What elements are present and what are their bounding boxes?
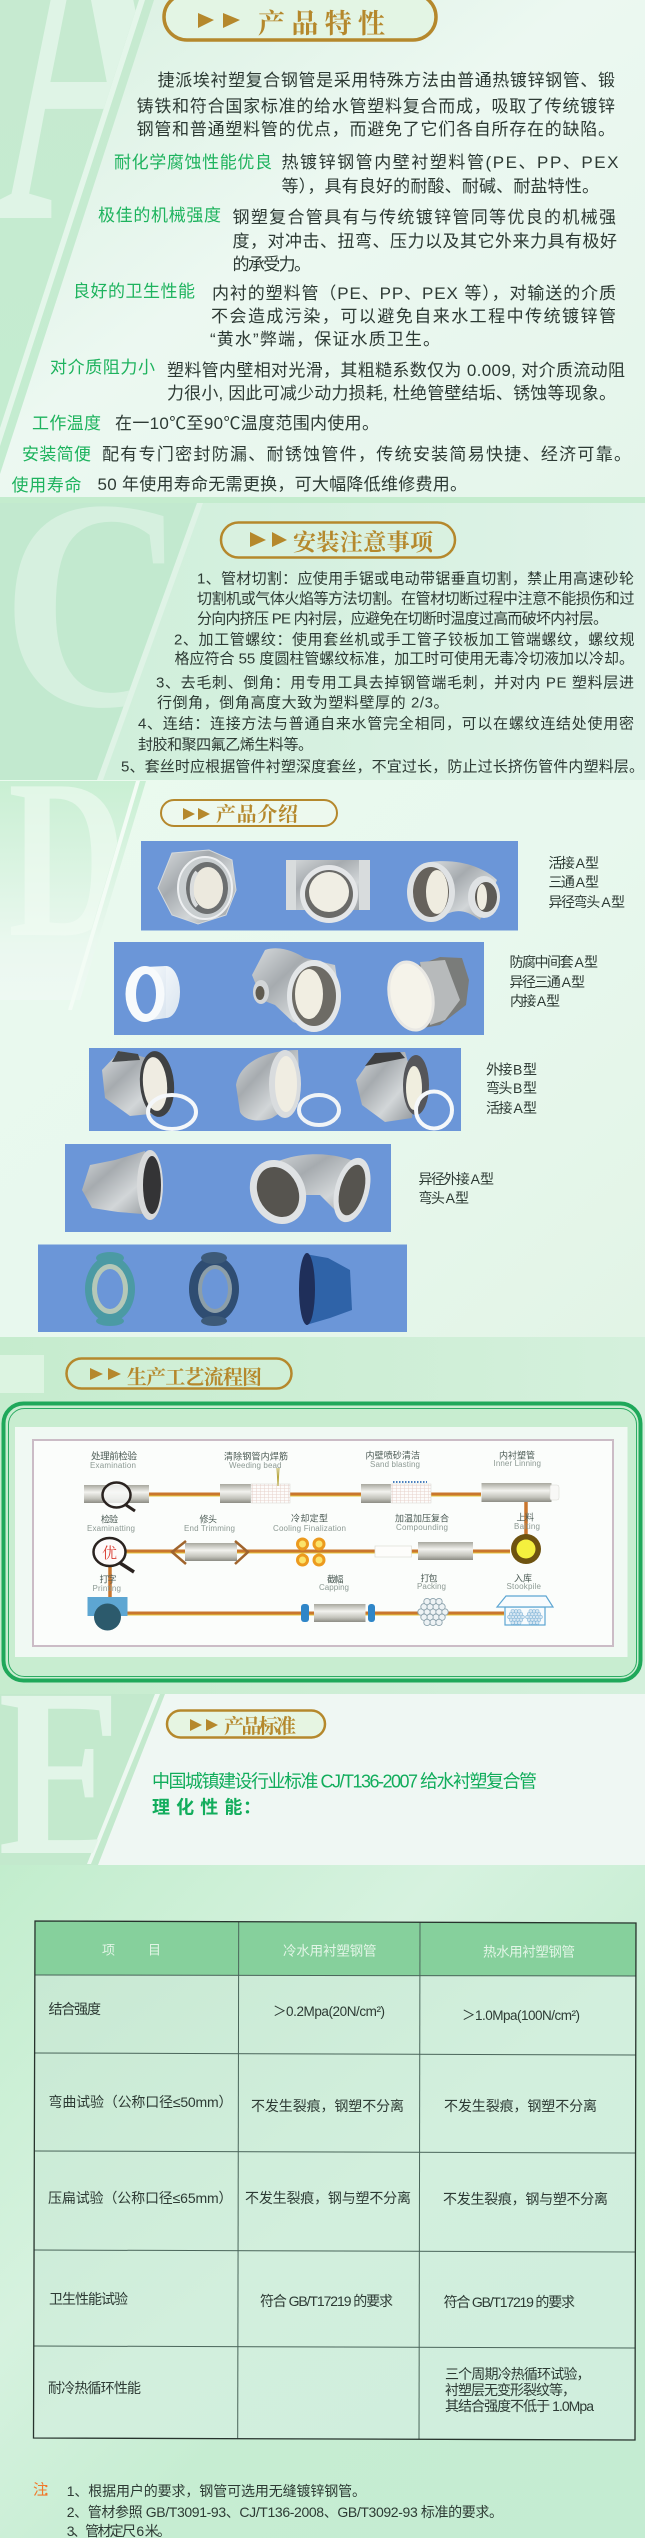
step: capping (301, 1573, 375, 1622)
heading: product features: 产品特性 (258, 2, 385, 41)
fittings row 4 labels: 弯头 A 型 (418, 1190, 469, 1206)
feature: chemical corrosion resistance (114, 153, 618, 196)
section backgrounds: D (8, 733, 126, 984)
footnotes: 1、根据用户的要求，钢管可选用无缝镀锌钢管。 (67, 2483, 366, 2499)
section backgrounds: C (2, 439, 186, 771)
fitting: elbow with ring (236, 1050, 339, 1125)
row: flattening test: 不发生裂痕，钢与塑不分离 (245, 2190, 411, 2206)
heading: production flowchart: 生产工艺流程图 (127, 1361, 262, 1390)
step: inner lining: Inner Linning (494, 1459, 541, 1468)
section backgrounds: E (0, 1640, 129, 1905)
fittings row 1 labels (548, 855, 625, 910)
fitting: male coupling with ring (102, 1050, 196, 1129)
note 4: 封胶和聚四氟乙烯生料等。 (138, 736, 313, 754)
step: stockpile (497, 1572, 553, 1625)
step: examinating: 优 (102, 1542, 117, 1563)
step: compounding: 加温加压复合 (395, 1512, 449, 1523)
row: hygiene test: 符合 GB/T17219 的要求 (444, 2294, 575, 2310)
section: product standards (33, 1710, 636, 2538)
feature: working temperature: 在一10℃至90℃温度范围内使用。 (115, 413, 379, 433)
note 1: 1、管材切割：应使用手锯或电动带锯垂直切割，禁止用高速砂轮 (197, 570, 634, 588)
row: bending test: 弯曲试验（公称口径≤50mm） (48, 2094, 232, 2110)
panel: fittings row 4 (65, 1144, 391, 1233)
step: examinating (87, 1513, 135, 1572)
fitting: reducing male coupling (82, 1150, 163, 1220)
note 3: 行倒角，倒角高度大致为塑料壁厚的 2/3。 (157, 694, 448, 712)
feature: chemical corrosion resistance: 热镀锌钢管内壁衬塑料管(PE、PP、PEX (282, 153, 618, 172)
feature: easy installation: 配有专门密封防漏、耐锈蚀管件，传统安装简易快捷、经济可靠。 (102, 445, 631, 464)
fittings row 3 labels: 活接 A 型 (486, 1100, 537, 1116)
panel: fittings row 2 (114, 942, 484, 1036)
feature: mechanical strength: 钢塑复合管具有与传统镀锌管同等优良的机械强 (232, 208, 616, 227)
feature: hygiene (73, 282, 616, 349)
table grid (34, 1921, 636, 2440)
row: thermal cycling: 三个周期冷热循环试验， (445, 2366, 590, 2382)
section: product introduction (38, 798, 625, 1332)
row: thermal cycling: 衬塑层无变形裂纹等， (445, 2382, 576, 2398)
step: examination: 处理前检验 (91, 1450, 137, 1462)
step: cooling finalization: 冷却定型 (291, 1512, 328, 1523)
row: bond strength: ＞0.2Mpa(20N/cm²) (273, 2004, 385, 2019)
intro paragraph: 铸铁和符合国家标准的给水管塑料复合而成，吸取了传统镀锌 (137, 97, 615, 116)
fitting: union with ring (356, 1052, 452, 1128)
note 2 (174, 630, 634, 668)
note 3 (156, 674, 634, 712)
note 2: 格应符合 55 度圆柱管螺纹标准，加工时可使用无毒冷切液加以冷却。 (174, 650, 634, 668)
feature: mechanical strength (98, 206, 617, 274)
fittings row 2 labels: 防腐中间套 A 型 (510, 954, 598, 970)
step: cooling finalization: Cooling Finalization (273, 1524, 346, 1533)
footnotes: 注： (33, 2482, 58, 2498)
standard statement: 中国城镇建设行业标准 CJ/T136-2007 给水衬塑复合管 (152, 1772, 537, 1792)
step: end trimming (172, 1513, 248, 1564)
note 1 (197, 570, 634, 628)
feature: low flow resistance: 塑料管内壁相对光滑，其粗糙系数仅为 0.009, 对介质流动阻 (167, 361, 625, 380)
heading: installation notes (221, 522, 455, 558)
fittings row 3 labels (486, 1062, 537, 1116)
step: stockpile: Stookpile (506, 1582, 542, 1591)
heading: installation notes: 安装注意事项 (293, 524, 435, 557)
panel: fittings row 1 (141, 841, 518, 930)
note 3: 3、去毛刺、倒角：用专用工具去掉钢管端毛刺，并对内 PE 塑料层进 (156, 674, 634, 692)
row: thermal cycling (48, 2366, 594, 2414)
heading: production flowchart (66, 1358, 292, 1390)
heading: product standards: 产品标准 (224, 1710, 296, 1739)
section: installation notes (121, 522, 644, 776)
step: weeding bead: 清除钢管内焊筋 (224, 1450, 288, 1461)
step: compounding: Compounding (396, 1523, 448, 1532)
step: printing (88, 1573, 128, 1630)
note 1: 切割机或气体火焰等方法切割。在管材切断过程中注意不能损伤和过 (197, 590, 634, 608)
row: thermal cycling: 其结合强度不低于 1.0Mpa (445, 2398, 594, 2414)
row: bond strength: 结合强度 (48, 2001, 101, 2017)
step: packing (417, 1572, 448, 1626)
fitting: reducing tee (252, 948, 341, 1032)
fitting: male adapter (381, 956, 469, 1036)
fitting: dark clamp (189, 1252, 239, 1326)
fittings row 2 labels: 内接 A 型 (510, 993, 560, 1009)
feature: mechanical strength: 极佳的机械强度 (98, 206, 221, 225)
row: hygiene test: 卫生性能试验 (49, 2291, 128, 2307)
fittings row 1 labels: 三通 A 型 (548, 874, 599, 890)
table header (35, 1921, 636, 1976)
step: capping: Capping (319, 1583, 349, 1592)
step: sand blasting: 内壁喷砂清洁 (366, 1449, 420, 1460)
feature: hygiene: 内衬的塑料管（PE、PP、PEX 等），对输送的介质 (212, 284, 616, 303)
step: baiting: 上料 (516, 1511, 534, 1522)
step: cooling finalization (273, 1512, 346, 1565)
feature: hygiene: “黄水”弊端，保证水质卫生。 (210, 330, 440, 349)
footnotes: 2、管材参照 GB/T3091-93、CJ/T136-2008、GB/T3092-93 标准的要求。 (67, 2504, 503, 2520)
note 2: 2、加工管螺纹：使用套丝机或手工管子铰板加工管端螺纹，螺纹规 (174, 630, 634, 648)
feature: easy installation: 安装简便 (22, 445, 91, 464)
feature: service life: 50 年使用寿命无需更换，可大幅降低维修费用。 (98, 474, 467, 494)
step: capping: 截幅 (327, 1573, 344, 1584)
table header: 热水用衬塑钢管 (483, 1944, 575, 1960)
fittings row 2 labels: 异径三通 A 型 (510, 974, 585, 990)
table header: 项 (102, 1942, 115, 1958)
section: product features (12, 0, 631, 495)
flow connector lines (110, 1494, 526, 1615)
step: sand blasting (361, 1449, 431, 1503)
feature: mechanical strength: 度，对冲击、扭弯、压力以及其它外来力具有极好 (232, 232, 617, 251)
heading: product introduction: 产品介绍 (216, 798, 298, 827)
step: baiting (511, 1511, 541, 1564)
step: inner lining: 内衬塑管 (499, 1449, 535, 1460)
fitting: union (158, 850, 236, 924)
step: examinating: 检验 (101, 1513, 118, 1524)
feature: chemical corrosion resistance: 耐化学腐蚀性能优良 (114, 153, 272, 172)
row: flattening test: 不发生裂痕，钢与塑不分离 (443, 2191, 608, 2207)
step: sand blasting: Sand blasting (370, 1460, 420, 1469)
fittings row 4 labels: 异径外接 A 型 (418, 1171, 494, 1187)
intro paragraph (137, 71, 615, 139)
feature: low flow resistance (50, 358, 625, 403)
row: hygiene test (49, 2291, 575, 2310)
panel: flowchart frame (4, 1404, 640, 1680)
step: inner lining (482, 1449, 559, 1502)
step: end trimming: 修头 (200, 1513, 217, 1524)
row: thermal cycling: 耐冷热循环性能 (48, 2380, 141, 2396)
table header: 冷水用衬塑钢管 (283, 1944, 376, 1958)
row: bending test (48, 2094, 597, 2114)
fitting: white sleeve (126, 966, 180, 1022)
row: hygiene test: 符合 GB/T17219 的要求 (260, 2293, 393, 2309)
footnotes (33, 2482, 503, 2538)
heading: product introduction (161, 798, 337, 827)
fitting: blue reducer (299, 1253, 352, 1325)
heading: product features (164, 0, 436, 41)
step: packing: Packing (417, 1582, 446, 1591)
step: examinating: Examinatting (87, 1524, 135, 1533)
row: bond strength: ＞1.0Mpa(100N/cm²) (462, 2008, 580, 2023)
step: stockpile: 入库 (514, 1572, 532, 1583)
fitting: tee (286, 860, 370, 923)
step: printing: 打字 (100, 1573, 116, 1584)
row: flattening test (48, 2190, 608, 2207)
fitting: teal clamp (85, 1252, 135, 1326)
row: bending test: 不发生裂痕，钢塑不分离 (251, 2098, 404, 2114)
feature: working temperature: 工作温度 (32, 414, 101, 433)
panel: fittings row 5 (38, 1244, 407, 1332)
fittings row 3 labels: 弯头 B 型 (486, 1080, 537, 1096)
fittings row 1 labels: 活接 A 型 (548, 855, 599, 871)
panel: fittings row 3 (89, 1048, 461, 1131)
feature: hygiene: 良好的卫生性能 (73, 282, 195, 301)
intro paragraph: 捷派埃衬塑复合钢管是采用特殊方法由普通热镀锌钢管、锻 (158, 71, 615, 90)
fittings row 2 labels (510, 954, 598, 1009)
fitting: elbow (240, 1151, 377, 1233)
fittings row 4 labels (418, 1171, 494, 1206)
note 4 (138, 714, 634, 754)
step: packing: 打包 (420, 1572, 438, 1583)
feature: service life: 使用寿命 (12, 475, 82, 495)
table header: 目 (148, 1942, 161, 1958)
intro paragraph: 钢管和普通塑料管的优点，而避免了它们各自所存在的缺陷。 (137, 120, 615, 139)
heading: product standards (167, 1710, 325, 1739)
table: physical and chemical properties (34, 1921, 636, 2440)
step: examination: Examination (90, 1461, 136, 1470)
feature: mechanical strength: 的承受力。 (232, 255, 311, 274)
section: production flowchart (4, 1358, 640, 1680)
feature: low flow resistance: 对介质阻力小 (50, 358, 155, 377)
feature: low flow resistance: 力很小, 因此可减少动力损耗, 杜绝管壁结垢、锈蚀等现象。 (167, 384, 616, 403)
feature: hygiene: 不会造成污染，可以避免自来水工程中传统镀锌管 (211, 307, 616, 326)
step: baiting: Baiting (514, 1522, 540, 1531)
note 5: 5、套丝时应根据管件衬塑深度套丝，不宜过长，防止过长挤伤管件内塑料层。 (121, 758, 644, 776)
step: end trimming: End Trimming (184, 1524, 235, 1533)
note 1: 分向内挤压 PE 内衬层，应避免在切断时温度过高而破坏内衬层。 (197, 610, 608, 628)
step: weeding bead (220, 1450, 290, 1503)
step: printing: Printing (92, 1584, 121, 1593)
step: examination (84, 1450, 149, 1511)
feature: chemical corrosion resistance: 等），具有良好的耐酸、耐碱、耐盐特性。 (282, 177, 599, 196)
row: flattening test: 压扁试验（公称口径≤65mm） (48, 2190, 232, 2206)
standard statement: 理 化 性 能： (152, 1796, 261, 1818)
row: bending test: 不发生裂痕，钢塑不分离 (444, 2098, 597, 2114)
step: compounding (375, 1512, 473, 1560)
step: weeding bead: Weeding bead (229, 1461, 282, 1470)
row: bond strength (48, 2001, 580, 2023)
note 4: 4、连结：连接方法与普通自来水管完全相同，可以在螺纹连结处使用密 (138, 714, 634, 732)
fittings row 1 labels: 异径弯头 A 型 (548, 894, 625, 910)
fittings row 3 labels: 外接 B 型 (486, 1062, 537, 1078)
standard statement (152, 1772, 537, 1818)
fitting: reducing elbow (407, 861, 500, 922)
